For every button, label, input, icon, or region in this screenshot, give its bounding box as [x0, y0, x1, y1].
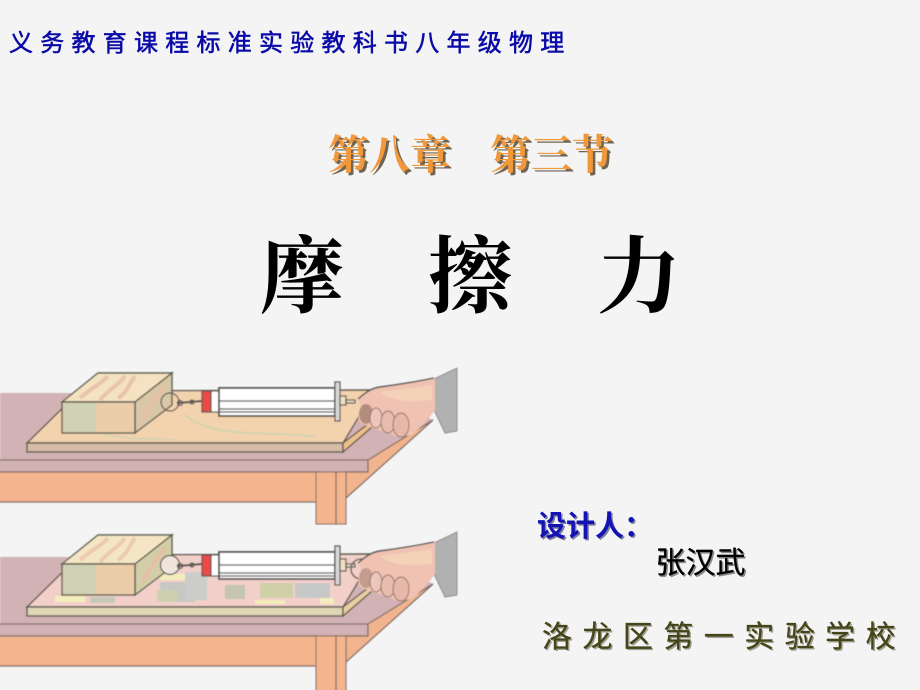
main title [260, 232, 681, 325]
block [62, 535, 172, 595]
school name: 洛龙区第一实验学校 [544, 622, 908, 656]
chapter heading [328, 132, 616, 180]
chapter heading: 第三节 [492, 134, 616, 180]
spring scale [160, 546, 355, 585]
designer label: 设计人： [538, 512, 655, 544]
school name: 洛龙区第一实验学校 [542, 621, 906, 654]
spring scale [161, 382, 355, 421]
hand [358, 368, 457, 437]
main title: 摩 [260, 232, 344, 325]
series title: 义务教育课程标准实验教科书八年级物理 [9, 30, 572, 57]
illustration: top experiment, wooden board [0, 368, 457, 524]
chapter heading: 第三节 [490, 132, 613, 178]
designer label: 设计人： [537, 510, 653, 543]
wooden board [27, 390, 375, 452]
designer name: 张汉武 [656, 547, 746, 580]
table [0, 557, 433, 690]
hand [351, 532, 457, 601]
block [62, 373, 172, 433]
illustration: bottom experiment, rough board [0, 532, 457, 690]
chapter heading: 第八章 [328, 132, 451, 178]
main title: 擦 [428, 232, 515, 325]
rough board [27, 554, 375, 616]
designer name: 张汉武 [657, 548, 747, 582]
chapter heading: 第八章 [330, 134, 454, 180]
main title: 力 [597, 232, 681, 325]
table [0, 393, 433, 524]
